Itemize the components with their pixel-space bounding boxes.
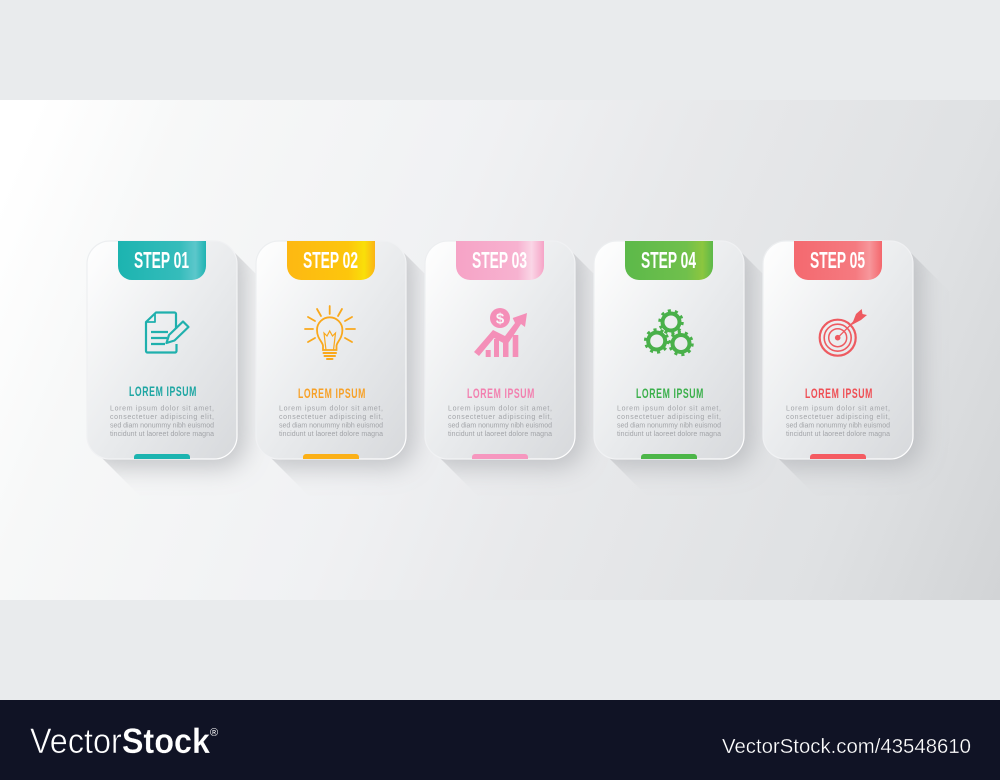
body text: consectetuer adipiscing elit,: [448, 414, 552, 421]
icon: light bulb: [305, 306, 355, 359]
card 2 body: [256, 241, 406, 459]
body text: Lorem ipsum dolor sit amet,: [617, 406, 721, 412]
body text: [279, 406, 383, 438]
icon: three gears: [646, 311, 692, 354]
body text: [786, 406, 890, 438]
body text: tincidunt ut laoreet dolore magna: [279, 431, 383, 438]
card 5: step 05: [762, 240, 931, 478]
body text: Lorem ipsum dolor sit amet,: [279, 406, 383, 412]
registered mark: ®: [210, 727, 218, 739]
footer image id: VectorStock.com/43548610: [722, 735, 971, 758]
card 4 shadow: [610, 253, 762, 478]
card 1 tab: STEP 01: [134, 247, 189, 273]
footer logo: VectorStock: [30, 722, 210, 761]
card 2 tab: [287, 241, 375, 280]
body text: [448, 406, 552, 438]
body text: [110, 406, 214, 438]
heading: LOREM IPSUM: [298, 385, 366, 401]
card 3 body: [425, 241, 575, 459]
card 5 shadow: [778, 253, 931, 478]
card 3 shadow: [440, 253, 593, 479]
bottom accent: [134, 454, 190, 459]
body text: tincidunt ut laoreet dolore magna: [448, 431, 552, 438]
central panel: [0, 100, 1000, 600]
card 2 tab: STEP 02: [303, 247, 358, 273]
body text: Lorem ipsum dolor sit amet,: [448, 406, 552, 412]
icon: target and arrow: [820, 309, 867, 356]
card 5 tab: STEP 05: [810, 247, 865, 273]
card 4: step 04: [594, 240, 762, 478]
card 4 tab: STEP 04: [641, 247, 696, 273]
card 1 tab: [118, 241, 206, 280]
card 3 tab: STEP 03: [472, 247, 527, 273]
card 1 body: [87, 241, 237, 459]
footer bar: [0, 700, 1000, 780]
body text: sed diam nonummy nibh euismod: [279, 422, 383, 430]
card 2: step 02: [256, 241, 425, 479]
body text: tincidunt ut laoreet dolore magna: [617, 431, 721, 438]
card 1 shadow: [102, 253, 256, 480]
heading: LOREM IPSUM: [805, 385, 873, 401]
card 3: step 03: [424, 241, 593, 479]
card 2 shadow: [272, 253, 425, 479]
body text: consectetuer adipiscing elit,: [279, 414, 383, 421]
card 4 tab: [625, 241, 713, 280]
body text: Lorem ipsum dolor sit amet,: [786, 406, 890, 412]
body text: tincidunt ut laoreet dolore magna: [786, 431, 890, 438]
bottom accent: [472, 454, 528, 459]
card 3 tab: [456, 241, 544, 280]
body text: sed diam nonummy nibh euismod: [617, 422, 721, 430]
icon: document and pencil: [146, 312, 188, 352]
heading: LOREM IPSUM: [129, 383, 197, 399]
card 4 body: [594, 241, 744, 459]
body text: consectetuer adipiscing elit,: [786, 414, 890, 421]
card 5 body: [763, 241, 913, 459]
card 5 tab: [794, 241, 882, 280]
bottom accent: [810, 454, 866, 459]
heading: LOREM IPSUM: [636, 385, 704, 401]
body text: consectetuer adipiscing elit,: [110, 414, 214, 421]
body text: sed diam nonummy nibh euismod: [110, 422, 214, 430]
body text: sed diam nonummy nibh euismod: [786, 422, 890, 430]
body text: consectetuer adipiscing elit,: [617, 414, 721, 421]
bottom accent: [641, 454, 697, 459]
body text: sed diam nonummy nibh euismod: [448, 422, 552, 430]
icon: growth chart with dollar coin: [474, 308, 527, 357]
body text: [617, 406, 721, 438]
body text: Lorem ipsum dolor sit amet,: [110, 406, 214, 412]
bottom accent: [303, 454, 359, 459]
heading: LOREM IPSUM: [467, 385, 535, 401]
card 1: step 01: [86, 240, 256, 480]
icon: growth chart with dollar coin: $: [496, 310, 505, 328]
body text: tincidunt ut laoreet dolore magna: [110, 431, 214, 438]
